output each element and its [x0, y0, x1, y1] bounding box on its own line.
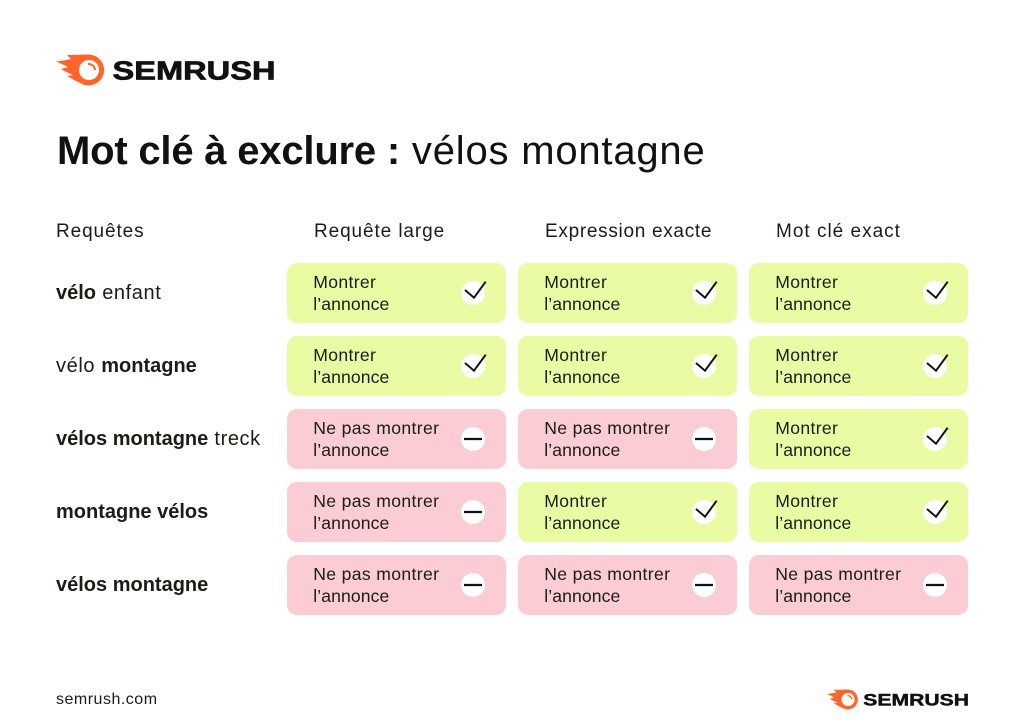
- cell: row 5 col 1: Ne pas montrer: [313, 564, 439, 584]
- cell: row 3 col 3: [749, 409, 968, 469]
- column heading: Requêtes: Requêtes: [56, 221, 145, 242]
- cell: row 1 col 2: [518, 263, 737, 323]
- cell: row 1 col 2: l’annonce: [544, 294, 620, 314]
- cell: row 1 col 3: [749, 263, 968, 323]
- cell: row 2 col 2: l’annonce: [544, 367, 620, 387]
- column heading: Expression exacte: Expression exacte: [545, 221, 712, 242]
- cell: row 2 col 2: Montrer: [544, 345, 607, 365]
- cell: row 3 col 3: Montrer: [775, 418, 838, 438]
- cell: row 3 col 2: l’annonce: [544, 440, 620, 460]
- row label: vélos montagne treck: vélos montagne treck: [56, 428, 261, 450]
- cell: row 1 col 1: l’annonce: [313, 294, 389, 314]
- cell: row 2 col 3: Montrer: [775, 345, 838, 365]
- cell: row 4 col 1: l’annonce: [313, 513, 389, 533]
- cell: row 1 col 1: Montrer: [313, 272, 376, 292]
- cell: row 5 col 2: Ne pas montrer: [544, 564, 670, 584]
- logo: Semrush header: SEMRUSH: [112, 55, 276, 85]
- cell: row 4 col 3: l’annonce: [775, 513, 851, 533]
- cell: row 4 col 3: [749, 482, 968, 542]
- row label: montagne vélos: montagne vélos: [56, 501, 208, 523]
- row label: vélos montagne: vélos montagne: [56, 574, 208, 596]
- title: Mot clé à exclure : vélos montagne: [57, 129, 706, 173]
- cell: row 4 col 2: [518, 482, 737, 542]
- cell: row 5 col 1: l’annonce: [313, 586, 389, 606]
- cell: row 5 col 3: Ne pas montrer: [775, 564, 901, 584]
- logo: Semrush header: [56, 54, 276, 86]
- cell: row 5 col 3: [749, 555, 968, 615]
- row label: vélo enfant: vélo enfant: [56, 282, 161, 304]
- cell: row 4 col 1: [287, 482, 506, 542]
- row label: vélo montagne: vélo montagne: [56, 355, 197, 377]
- cell: row 2 col 1: l’annonce: [313, 367, 389, 387]
- cell: row 3 col 2: [518, 409, 737, 469]
- cell: row 1 col 3: Montrer: [775, 272, 838, 292]
- cell: row 5 col 2: [518, 555, 737, 615]
- cell: row 2 col 3: l’annonce: [775, 367, 851, 387]
- cell: row 4 col 3: Montrer: [775, 491, 838, 511]
- cell: row 3 col 3: l’annonce: [775, 440, 851, 460]
- cell: row 5 col 1: [287, 555, 506, 615]
- cell: row 2 col 2: [518, 336, 737, 396]
- logo: Semrush footer: SEMRUSH: [863, 691, 969, 710]
- cell: row 4 col 1: Ne pas montrer: [313, 491, 439, 511]
- cell: row 5 col 2: l’annonce: [544, 586, 620, 606]
- logo: Semrush footer: [826, 690, 969, 710]
- cell: row 2 col 1: Montrer: [313, 345, 376, 365]
- column heading: Mot clé exact: Mot clé exact: [776, 221, 901, 242]
- cell: row 3 col 1: l’annonce: [313, 440, 389, 460]
- cell: row 3 col 2: Ne pas montrer: [544, 418, 670, 438]
- cell: row 1 col 1: [287, 263, 506, 323]
- cell: row 2 col 1: [287, 336, 506, 396]
- cell: row 2 col 3: [749, 336, 968, 396]
- cell: row 1 col 2: Montrer: [544, 272, 607, 292]
- column heading: Requête large: Requête large: [314, 221, 445, 242]
- cell: row 1 col 3: l’annonce: [775, 294, 851, 314]
- cell: row 4 col 2: l’annonce: [544, 513, 620, 533]
- footer: semrush.com: semrush.com: [56, 691, 158, 708]
- cell: row 3 col 1: [287, 409, 506, 469]
- cell: row 4 col 2: Montrer: [544, 491, 607, 511]
- cell: row 3 col 1: Ne pas montrer: [313, 418, 439, 438]
- cell: row 5 col 3: l’annonce: [775, 586, 851, 606]
